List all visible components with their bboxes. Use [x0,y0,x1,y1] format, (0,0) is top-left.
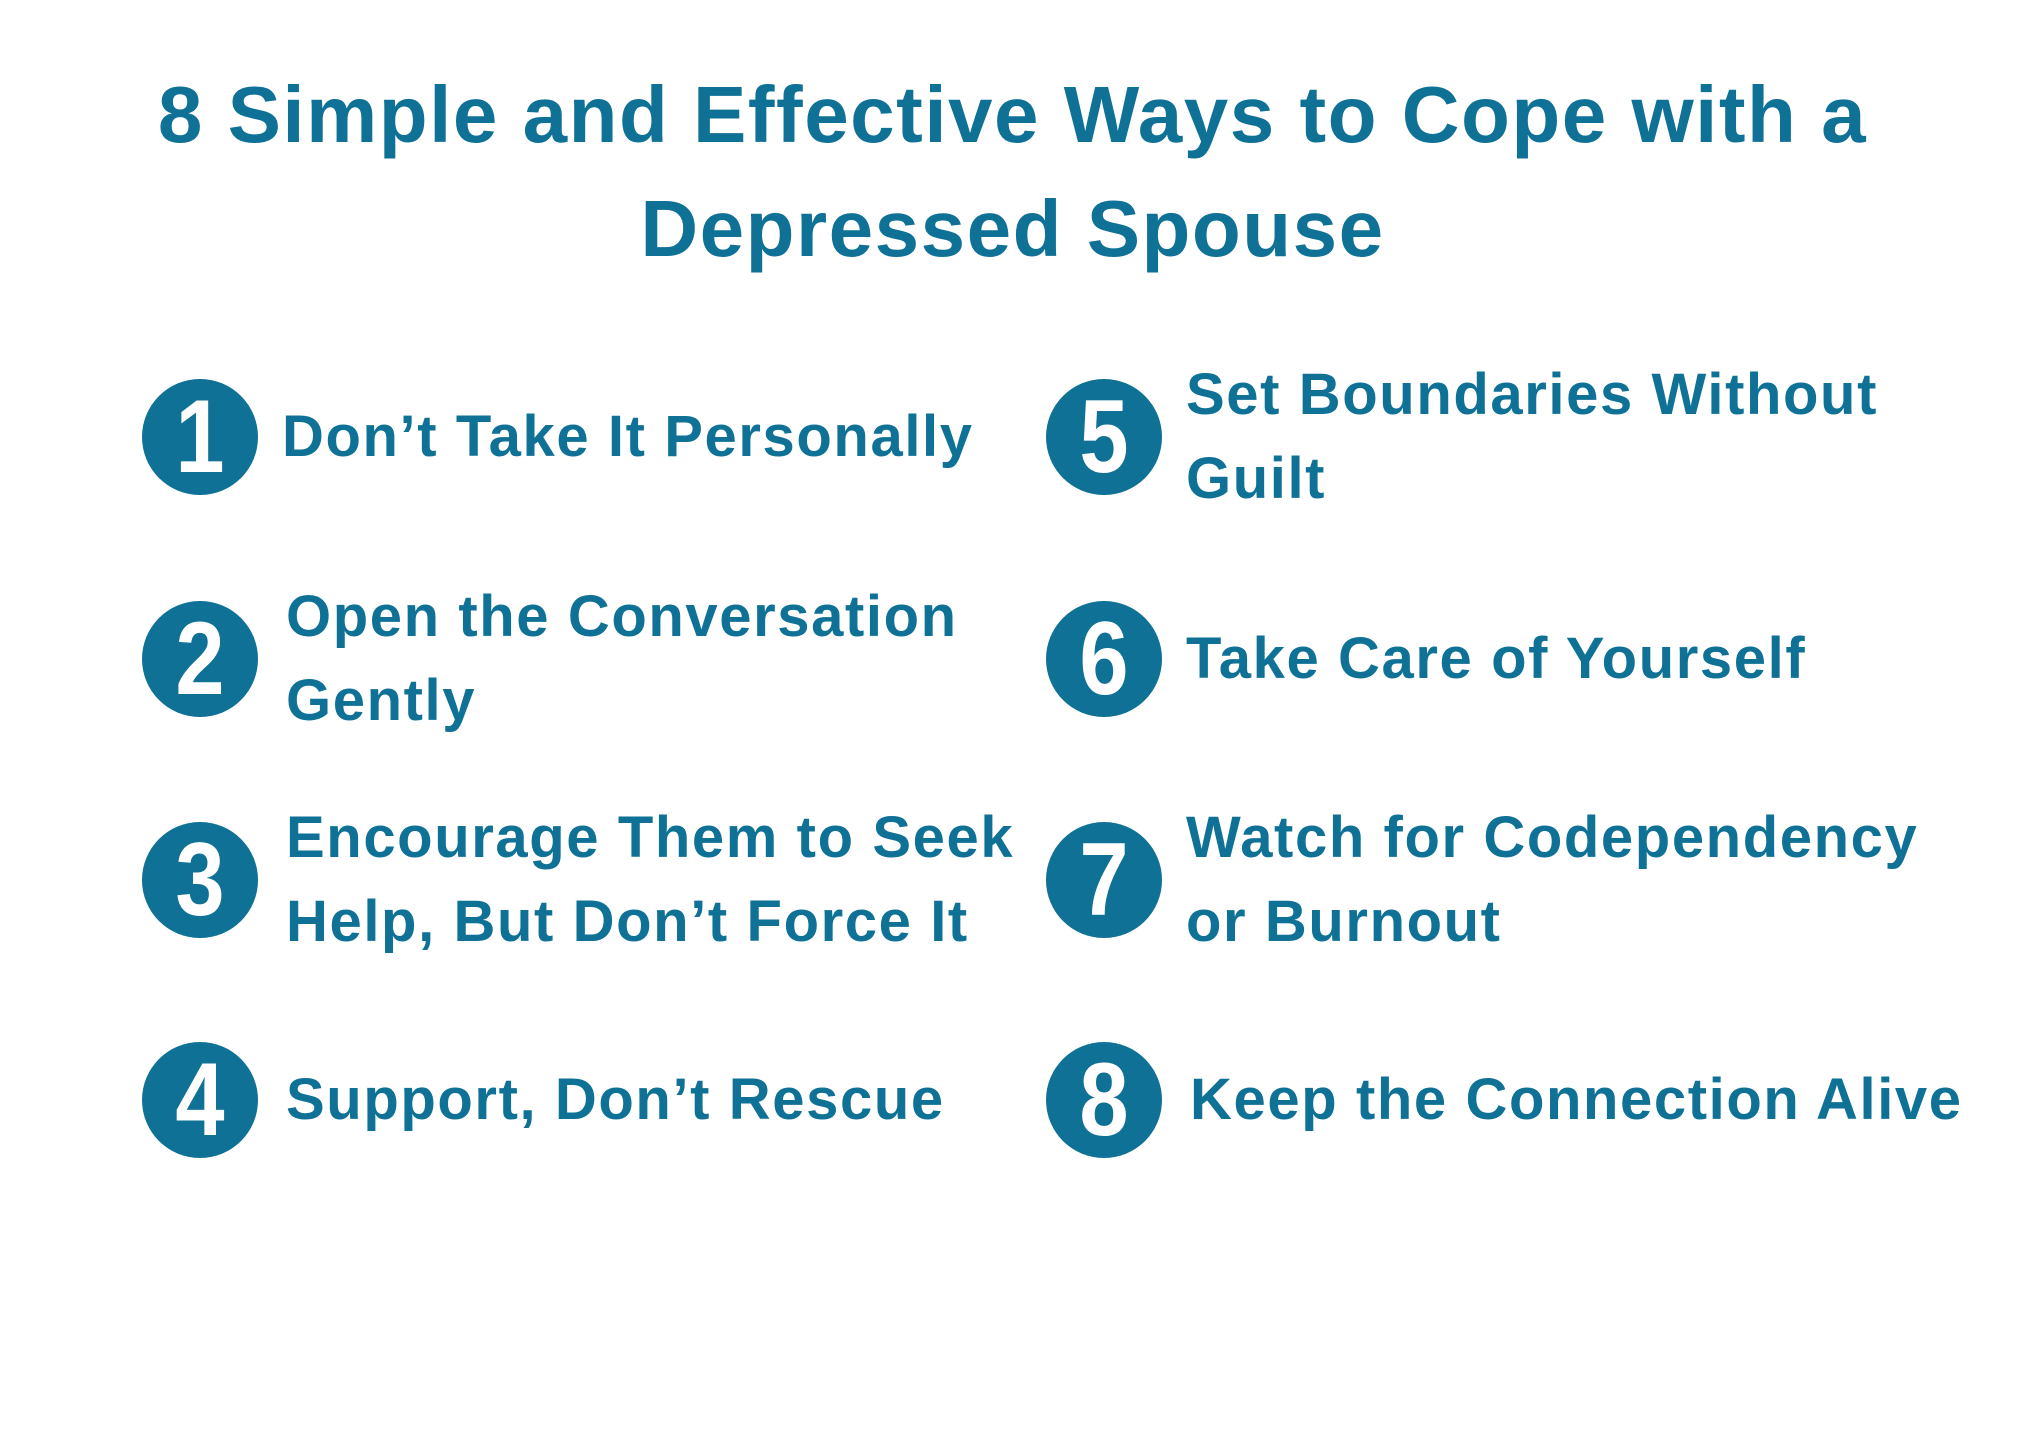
item 5: Set Boundaries Without [1186,362,1878,427]
item 3: 3 [175,822,225,938]
item 1 [142,379,974,495]
title [158,70,1867,273]
item 3 [142,805,1014,954]
item 5: Guilt [1186,446,1326,511]
item 7: Watch for Codependency [1186,805,1918,870]
item 6 [1046,601,1806,717]
item 8: Keep the Connection Alive [1190,1067,1963,1132]
item 4: Support, Don’t Rescue [286,1067,945,1132]
item 7: 7 [1079,822,1129,938]
item 8: 8 [1079,1042,1129,1158]
item 2 [142,584,958,733]
item 7 [1046,805,1918,954]
title: 8 Simple and Effective Ways to Cope with a [158,70,1867,159]
item 6: Take Care of Yourself [1186,626,1806,691]
item 4: 4 [175,1042,225,1158]
item 3: Help, But Don’t Force It [286,889,969,954]
item 3: Encourage Them to Seek [286,805,1014,870]
title: Depressed Spouse [640,184,1385,273]
item 2: Open the Conversation [286,584,958,649]
item 8 [1046,1042,1963,1158]
item 4 [142,1042,945,1158]
item 1: Don’t Take It Personally [282,404,974,469]
item 6: 6 [1079,601,1129,717]
item 1: 1 [175,379,225,495]
item 5 [1046,362,1878,511]
item 2: 2 [175,601,225,717]
item 7: or Burnout [1186,889,1502,954]
item 2: Gently [286,668,476,733]
item 5: 5 [1079,379,1129,495]
